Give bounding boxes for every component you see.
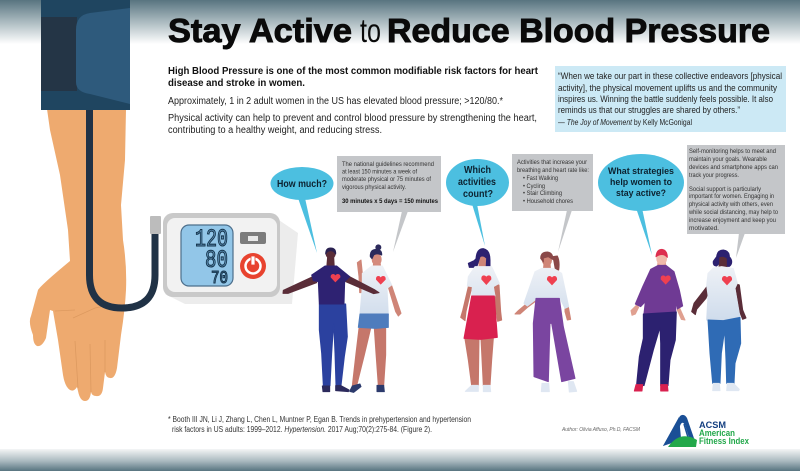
figure: woman in blue skirt	[350, 244, 401, 392]
speech bubble: which activities count: Which	[464, 164, 491, 176]
intro text	[168, 66, 539, 136]
intro text: contributing to a healthy weight, and reducing stress.	[168, 125, 382, 136]
intro text: Physical activity can help to prevent and control blood pressure by strengthening the heart,	[168, 113, 537, 124]
speech bubble: how much: How much?	[277, 178, 327, 190]
info box: strategies: important for women. Engaging in	[689, 193, 774, 200]
logo: ACSM American Fitness Index	[663, 415, 749, 447]
info box: strategies: devices and smartphone apps can	[689, 164, 778, 171]
top gradient band	[0, 0, 800, 44]
title: Stay Active	[168, 12, 352, 49]
info box: activities: • Household chores	[523, 198, 574, 205]
intro text: High Blood Pressure is one of the most common modifiable risk factors for heart	[168, 66, 539, 77]
icon: blood pressure cuff	[41, 0, 130, 110]
figure: woman in purple trousers	[515, 252, 577, 392]
quote callout: inspires us. Winning the battle suddenly feels possible. It also	[558, 94, 773, 104]
info box: strategies: track your progress.	[689, 172, 739, 179]
quote callout: activity], the physical movement uplifts us and the community	[558, 83, 777, 93]
info box: strategies: physical activity with others, even	[689, 201, 773, 208]
footnote: risk factors in US adults: 1999–2012. Hypertension. 2017 Aug;70(2):275-84. (Figure 2).	[172, 425, 432, 434]
info box: guidelines: at least 150 minutes a week of	[342, 168, 417, 176]
info box: activities: • Cycling	[523, 183, 545, 190]
figure: woman in blue with arms out	[283, 248, 379, 392]
info box: guidelines: moderate physical or 75 minutes of	[342, 176, 431, 183]
figures pair: strategies	[631, 249, 746, 391]
quote callout: “When we take our part in these collective endeavors [physical	[558, 71, 782, 81]
info box: strategies: increase enjoyment and keep you	[689, 217, 776, 224]
figure: woman in jeans	[692, 250, 746, 391]
figures pair: how much	[283, 244, 401, 392]
info box: guidelines: 30 minutes x 5 days = 150 minutes	[342, 198, 438, 205]
speech bubble: how much	[270, 167, 334, 253]
info box: strategies: maintain your goals. Wearable	[689, 156, 767, 163]
footnote	[168, 415, 471, 434]
icon: blood pressure monitor: 120	[195, 225, 228, 254]
icon: blood pressure monitor: 80	[205, 246, 228, 275]
speech bubble: which activities count: count?	[463, 188, 493, 200]
bottom gradient band	[0, 449, 800, 471]
info box: guidelines: The national guidelines recommend	[342, 161, 434, 168]
illustration: arm with hand	[30, 109, 126, 401]
info box: activities: Activities that increase your	[517, 159, 588, 166]
info box: activities: • Stair Climbing	[523, 190, 562, 197]
title: to	[360, 12, 381, 49]
info box: activities: breathing and heart rate like:	[517, 167, 589, 174]
intro text: Approximately, 1 in 2 adult women in the US has elevated blood pressure; >120/80.*	[168, 96, 503, 107]
info box: guidelines: vigorous physical activity.	[342, 184, 406, 191]
icon: tube	[90, 110, 155, 308]
icon: blood pressure monitor	[150, 213, 298, 304]
figure: woman in red skirt	[461, 249, 502, 392]
info box: strategies: motivated.	[689, 225, 719, 232]
icon: blood pressure monitor: 70	[211, 269, 228, 289]
info box: strategies: while social distancing, may help to	[688, 209, 778, 216]
info box: guidelines	[337, 156, 441, 252]
quote callout: reminds us that our struggles are shared by others.”	[558, 105, 740, 115]
speech bubble: what strategies	[598, 154, 684, 255]
info box: strategies	[687, 145, 785, 258]
author credit: Author: Olivia Affuso, Ph.D, FACSM	[561, 427, 640, 433]
figure: woman in purple sweater	[631, 249, 685, 391]
info box: strategies: Social support is particularly	[689, 186, 762, 193]
intro text: disease and stroke in women.	[168, 78, 305, 89]
info box: strategies: Self-monitoring helps to meet and	[689, 148, 776, 155]
speech bubble: what strategies: help women to	[610, 177, 672, 188]
info box: activities: • Fast Walking	[523, 175, 558, 182]
logo: ACSM American Fitness Index: Fitness Index	[699, 436, 749, 446]
speech bubble: which activities count: activities	[458, 176, 496, 188]
logo: ACSM American Fitness Index: ACSM	[699, 420, 726, 430]
title	[168, 12, 770, 49]
speech bubble: what strategies: stay active?	[616, 188, 666, 199]
figures pair: which activities	[461, 249, 577, 392]
title: Reduce Blood Pressure	[387, 12, 770, 49]
speech bubble: which activities count	[446, 159, 509, 246]
quote callout: — The Joy of Movement by Kelly McGonigal	[558, 118, 692, 127]
quote callout	[555, 66, 786, 132]
info box: activities	[512, 154, 593, 252]
footnote: * Booth III JN, Li J, Zhang L, Chen L, Muntner P, Egan B. Trends in prehypertension and hypertension	[168, 415, 471, 424]
logo: ACSM American Fitness Index: American	[699, 428, 735, 438]
speech bubble: what strategies: What strategies	[608, 166, 674, 177]
